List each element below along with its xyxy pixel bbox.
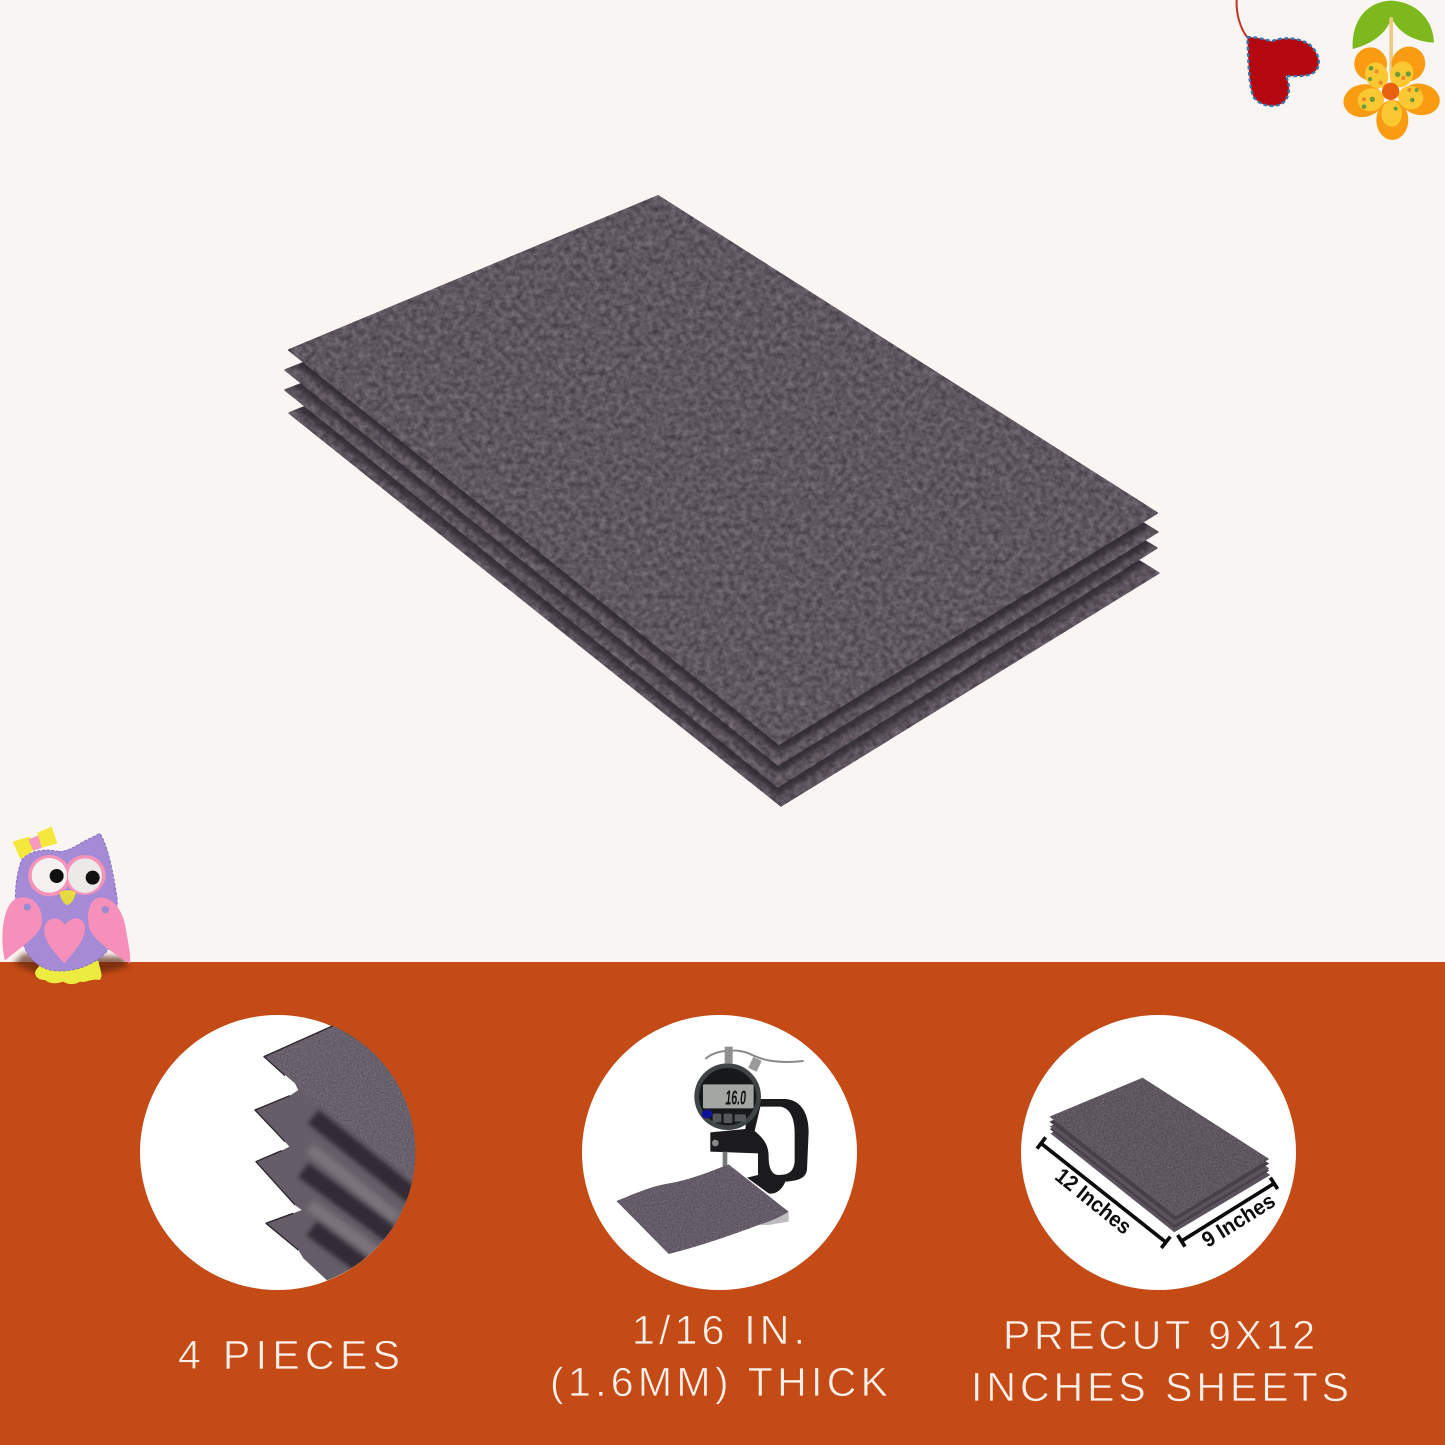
leaves bbox=[1353, 1, 1434, 49]
stacked sheet edge detail bbox=[254, 1026, 416, 1280]
12 inches label: 12 Inches bbox=[1051, 1163, 1137, 1239]
beak bbox=[59, 890, 76, 905]
stem bbox=[1389, 17, 1393, 74]
spindle bbox=[723, 1152, 727, 1170]
wing buttons bbox=[24, 903, 109, 913]
felt sample bbox=[616, 1164, 789, 1254]
mini stack of sheets bbox=[1049, 1078, 1270, 1232]
caption: precut size: PRECUT 9X12 bbox=[1003, 1312, 1315, 1358]
screw bbox=[712, 1140, 719, 1146]
white circle bbox=[1021, 1015, 1296, 1290]
display bbox=[703, 1084, 754, 1108]
lever bbox=[705, 1051, 804, 1062]
feet bbox=[35, 961, 102, 984]
blue button bbox=[702, 1110, 712, 1118]
white circle bbox=[140, 1015, 415, 1290]
circle 2: thickness gauge bbox=[582, 1015, 857, 1290]
dial bbox=[694, 1063, 761, 1130]
light bands bbox=[310, 1148, 397, 1253]
12 inch dimension line bbox=[1037, 1137, 1170, 1248]
keys bbox=[713, 1114, 746, 1123]
caption: precut size bbox=[971, 1312, 1349, 1410]
gauge frame bbox=[710, 1099, 809, 1194]
icon: orange felt flower with green leaves bbox=[1341, 1, 1442, 140]
right wing bbox=[88, 897, 130, 963]
inner petals bbox=[1356, 57, 1425, 127]
dark sheet edges bbox=[255, 1026, 333, 1250]
eyes bbox=[28, 855, 106, 896]
shadow under sheet bbox=[759, 1212, 789, 1225]
top sheet bbox=[266, 1026, 416, 1180]
caption: precut size: INCHES SHEETS bbox=[971, 1364, 1349, 1410]
icon: purple felt owl bbox=[2, 827, 130, 984]
heart bbox=[44, 918, 85, 963]
silhouette of lower sheets bbox=[256, 1026, 416, 1280]
caption: 4 pieces: 4 PIECES bbox=[178, 1332, 400, 1378]
display reading: 16.0 bbox=[725, 1088, 746, 1110]
circle 3: 9x12 dimensions bbox=[1021, 1015, 1296, 1290]
product image: stack of four grey felt sheets bbox=[285, 196, 1159, 806]
button bbox=[1382, 83, 1399, 100]
dark bands bbox=[303, 1117, 413, 1267]
circle 1: four pieces close-up bbox=[140, 1015, 416, 1290]
outer petals bbox=[1341, 41, 1442, 140]
bow bbox=[13, 827, 57, 859]
caption: thickness bbox=[550, 1307, 888, 1405]
9 inches label: 9 Inches bbox=[1197, 1188, 1280, 1252]
9 inch dimension line bbox=[1178, 1178, 1278, 1247]
icon: red felt heart on string bbox=[1237, 0, 1319, 106]
petal dots bbox=[1362, 66, 1419, 111]
caption: thickness: (1.6MM) THICK bbox=[550, 1359, 888, 1405]
white circle bbox=[582, 1015, 857, 1290]
bottom orange band bbox=[0, 962, 1445, 1445]
body bbox=[15, 833, 117, 971]
caption: thickness: 1/16 IN. bbox=[632, 1307, 805, 1353]
left wing bbox=[2, 897, 42, 961]
owl shadow bbox=[13, 953, 128, 973]
